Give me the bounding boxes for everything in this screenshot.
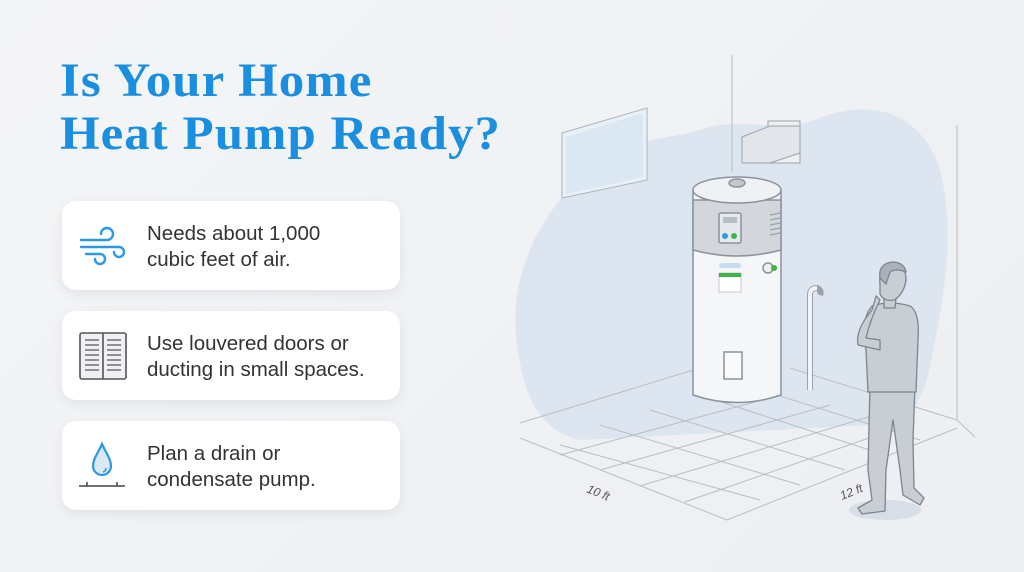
- card: louvered doors: [62, 311, 400, 400]
- text: Needs about 1,000: [147, 222, 320, 245]
- illustration: room with heat pump water heater: 12 ft: [838, 481, 865, 503]
- icon: wind: [80, 226, 126, 266]
- text: Use louvered doors or: [147, 332, 349, 355]
- text: ducting in small spaces.: [147, 358, 365, 381]
- window: [562, 108, 647, 198]
- text: condensate pump.: [147, 468, 316, 491]
- title: Heat Pump Ready?: [60, 107, 501, 160]
- card: air: [62, 201, 400, 290]
- card: drain: [62, 421, 400, 510]
- text: [147, 442, 316, 491]
- text: cubic feet of air.: [147, 248, 291, 271]
- duct vent: [742, 121, 800, 163]
- icon: louvered door: [79, 332, 127, 380]
- person: [849, 262, 924, 520]
- drain pipe: [810, 288, 821, 390]
- text: Plan a drain or: [147, 442, 280, 465]
- dimension labels: 10 ft: [585, 482, 612, 504]
- text: [147, 332, 365, 381]
- title: Is Your Home: [60, 54, 372, 107]
- room lines: [520, 55, 975, 520]
- background blob: [515, 109, 948, 440]
- title: [60, 54, 501, 160]
- heat pump water heater: [693, 177, 781, 402]
- text: [147, 222, 320, 271]
- icon: water drop: [79, 441, 125, 487]
